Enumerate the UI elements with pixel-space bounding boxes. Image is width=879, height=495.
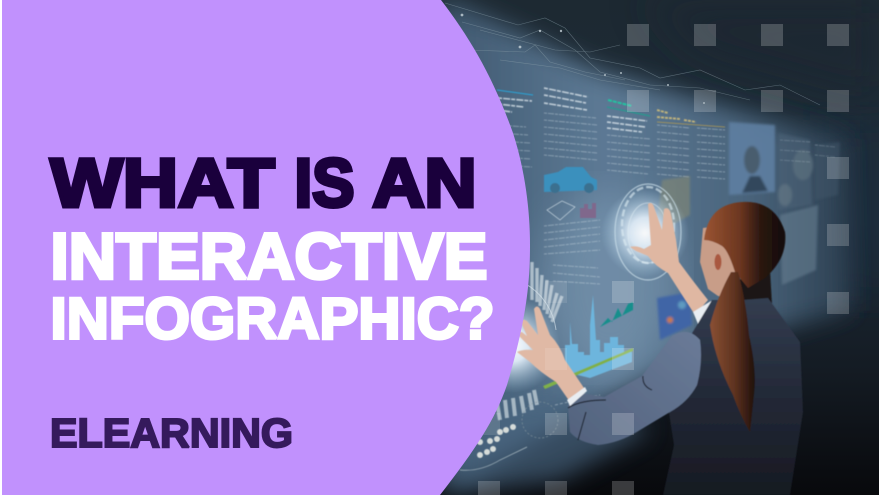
ear <box>714 254 722 270</box>
category label: elearning: ELEARNING <box>50 410 293 456</box>
screen car graphic <box>544 167 597 193</box>
title: interactive: INTERACTIVE <box>50 220 488 292</box>
circuit lines <box>445 3 820 105</box>
glowing orb under left hand <box>464 283 560 393</box>
face and neck <box>700 225 738 298</box>
jacket sleeve <box>568 332 701 445</box>
woman <box>517 202 803 495</box>
distant screen panels <box>778 133 840 285</box>
glowing orb and rings under right hand <box>601 184 689 280</box>
hair <box>704 202 785 288</box>
lower radial chart and hexagons <box>460 390 600 470</box>
right shirt cuff <box>693 301 716 324</box>
screen text columns <box>497 88 835 284</box>
title: infographic: INFOGRAPHIC? <box>50 286 494 352</box>
radial bar chart <box>532 262 562 322</box>
left arm and hand <box>517 306 584 402</box>
photo: woman using a holographic interface <box>430 0 879 495</box>
title: what is an: AN <box>372 144 476 222</box>
title: what is an: IS <box>294 144 354 222</box>
neck shadow <box>722 270 772 305</box>
translucent squares <box>478 24 849 495</box>
left shirt cuff <box>567 387 587 406</box>
purple curved panel <box>2 0 530 495</box>
teal mountain chart <box>600 302 633 327</box>
photo background <box>430 0 879 495</box>
world map panel <box>658 176 690 225</box>
jacket body <box>663 298 803 495</box>
right arm and hand <box>630 203 708 315</box>
portrait panel <box>729 122 775 195</box>
ponytail <box>710 272 755 432</box>
screen constellation and bars <box>547 201 596 220</box>
title: what is an <box>50 144 476 222</box>
title: what is an: WHAT <box>50 144 274 222</box>
city skyline chart <box>543 295 633 389</box>
nebula data panel <box>657 292 692 340</box>
holographic screen <box>440 0 850 495</box>
